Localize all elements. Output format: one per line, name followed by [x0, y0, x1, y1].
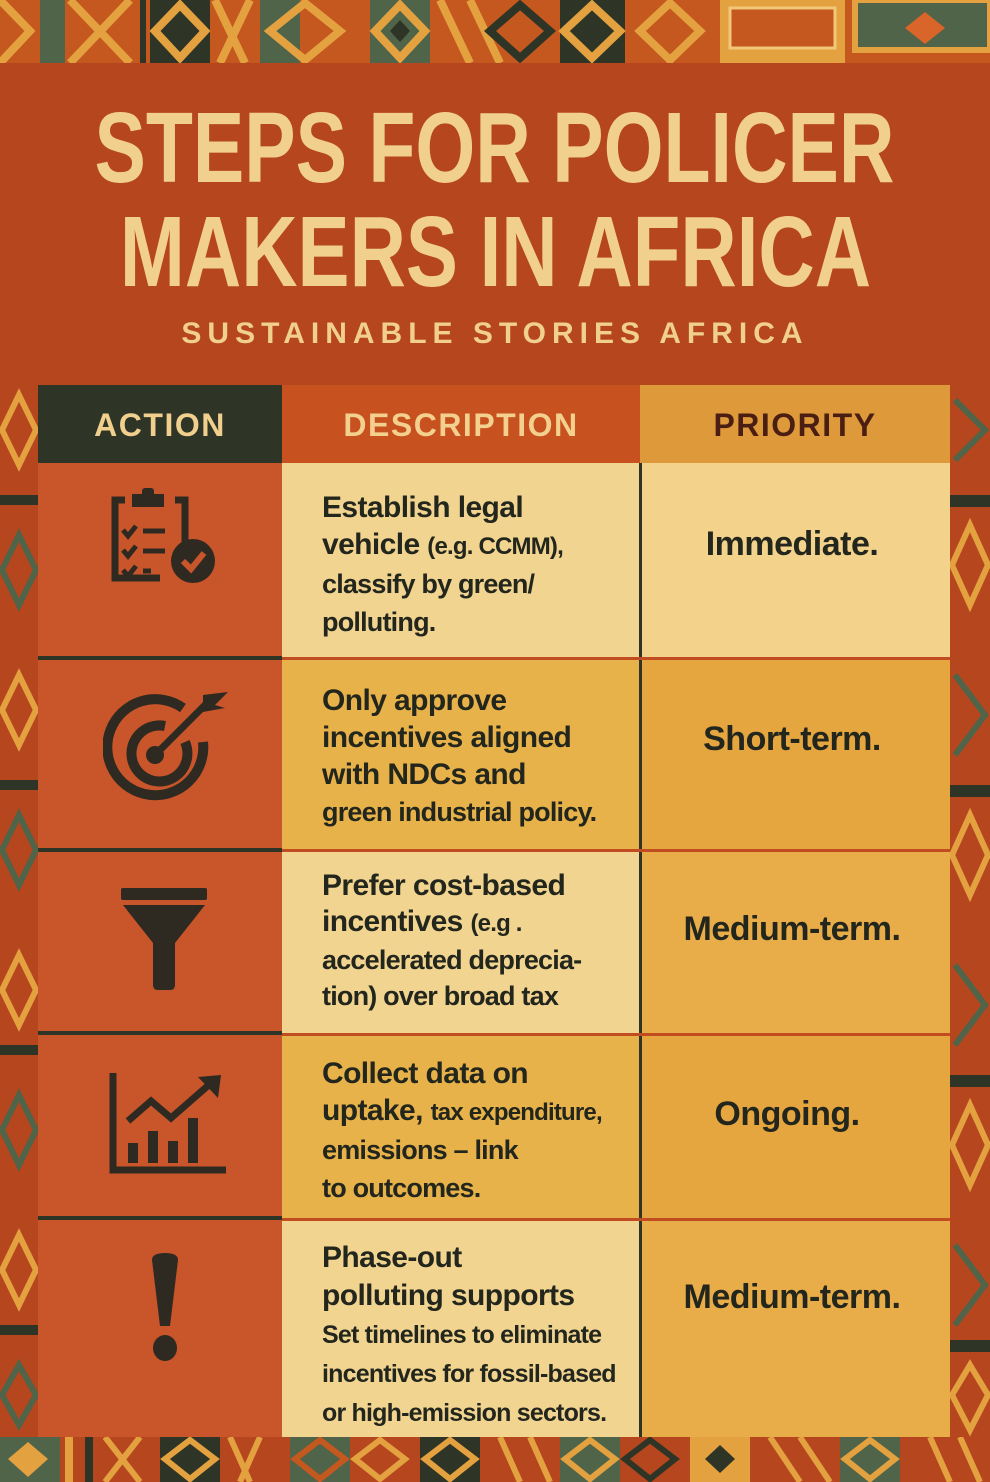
description 5: or high-emission sectors. [322, 1399, 606, 1427]
priority 5: Medium-term. [684, 1278, 900, 1316]
description 2: Only approve [322, 684, 507, 717]
icon: clipboard [112, 488, 215, 583]
description cells [282, 463, 640, 658]
description 2: with NDCs and [322, 758, 526, 791]
description 4: uptake, tax expenditure, [322, 1094, 602, 1127]
priority 3: Medium-term. [684, 910, 900, 948]
icon: bar chart [110, 1073, 226, 1174]
description 5: Set timelines to eliminate [322, 1321, 601, 1349]
description 1: classify by green/ [322, 569, 534, 599]
description 3: incentives (e.g . [322, 905, 522, 938]
description 3: tion) over broad tax [322, 981, 558, 1011]
description 5: Phase-out [322, 1241, 462, 1274]
description 2: incentives aligned [322, 721, 571, 754]
description 1 [322, 491, 563, 637]
icon: funnel [121, 888, 207, 990]
header: action: ACTION [94, 407, 226, 443]
description 1: vehicle (e.g. CCMM), [322, 528, 563, 561]
description 3 [322, 869, 582, 1011]
header: description [282, 385, 640, 463]
top pattern border [0, 0, 990, 63]
description 3: accelerated deprecia- [322, 945, 581, 975]
description 5: polluting supports [322, 1279, 574, 1312]
title: STEPS FOR POLICER [95, 92, 895, 204]
description 4: to outcomes. [322, 1173, 480, 1203]
table [38, 385, 950, 463]
icon: exclamation [152, 1253, 178, 1361]
description 3: Prefer cost-based [322, 869, 565, 902]
description 2: green industrial policy. [322, 797, 596, 827]
priority cells [642, 463, 950, 658]
description 4: emissions – link [322, 1135, 518, 1165]
description 2 [322, 684, 596, 827]
icon: target [103, 692, 228, 800]
description 4 [322, 1057, 602, 1203]
bottom pattern [0, 1437, 990, 1482]
priority 2: Short-term. [703, 720, 881, 758]
description 5 [322, 1241, 616, 1427]
action column [38, 463, 282, 1437]
header: priority [640, 385, 950, 463]
text: MAKERS IN AFRICA [119, 196, 871, 308]
header: description: DESCRIPTION [343, 407, 579, 443]
description 4: Collect data on [322, 1057, 528, 1090]
description 5: incentives for fossil-based [322, 1360, 616, 1388]
left side pattern [0, 385, 38, 1437]
header: priority: PRIORITY [713, 407, 877, 443]
priority 1: Immediate. [706, 525, 878, 563]
priority 4: Ongoing. [714, 1095, 860, 1133]
description 1: Establish legal [322, 491, 523, 524]
title band [0, 63, 990, 385]
description 1: polluting. [322, 607, 435, 637]
right side pattern [950, 385, 990, 1437]
subtitle: SUSTAINABLE STORIES AFRICA [181, 317, 809, 350]
header: action [38, 385, 282, 463]
